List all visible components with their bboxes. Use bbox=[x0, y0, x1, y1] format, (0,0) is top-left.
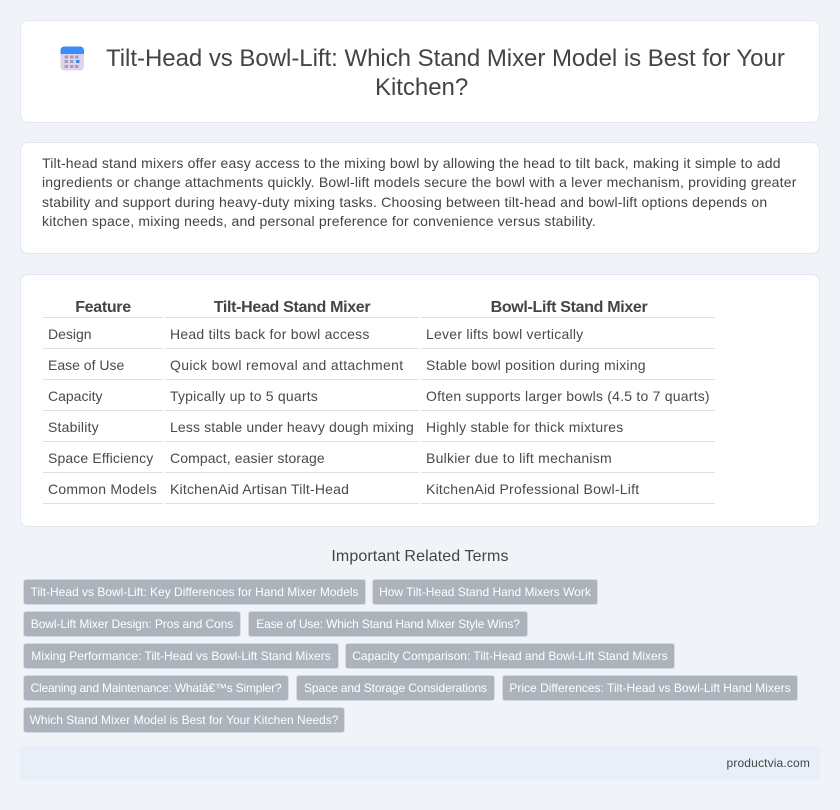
row: design bbox=[48, 326, 584, 342]
table header row: Bowl-Lift Stand Mixer bbox=[491, 299, 647, 316]
tag bbox=[23, 643, 339, 669]
table bbox=[43, 299, 715, 504]
tag: Mixing Performance: Tilt-Head vs Bowl-Lift Stand Mixers bbox=[31, 649, 331, 663]
title: Kitchen? bbox=[375, 74, 468, 101]
text block: introduction: ingredients or change attachments quickly. Bowl-lift models secure the bowl with a lever mechanism, providing greater bbox=[42, 174, 797, 190]
tag: Price Differences: Tilt-Head vs Bowl-Lift Hand Mixers bbox=[509, 681, 791, 695]
title: Tilt-Head vs Bowl-Lift: Which Stand Mixer Model is Best for Your bbox=[106, 45, 785, 72]
tag: Space and Storage Considerations bbox=[304, 681, 487, 695]
row: space efficiency bbox=[48, 450, 612, 466]
footer bbox=[20, 746, 820, 780]
row: ease of use: Ease of Use bbox=[48, 357, 124, 373]
tag bbox=[296, 675, 495, 701]
row: design: Lever lifts bowl vertically bbox=[426, 326, 583, 342]
panel: header bbox=[20, 20, 820, 123]
row: common models: KitchenAid Artisan Tilt-Head bbox=[170, 481, 349, 497]
panel: introduction bbox=[20, 142, 820, 254]
row: common models bbox=[48, 481, 640, 497]
row: capacity: Typically up to 5 quarts bbox=[170, 388, 318, 404]
row: ease of use bbox=[48, 357, 646, 373]
footer source text: productvia.com bbox=[727, 756, 810, 770]
tag bbox=[248, 611, 528, 637]
tag: Bowl-Lift Mixer Design: Pros and Cons bbox=[31, 617, 233, 631]
row: stability: Less stable under heavy dough mixing bbox=[170, 419, 414, 435]
tag: Cleaning and Maintenance: Whatâ€™s Simpler? bbox=[31, 681, 281, 695]
tag: Ease of Use: Which Stand Hand Mixer Style Wins? bbox=[256, 617, 520, 631]
text block: introduction: kitchen space, mixing needs, and personal preference for convenience versus stability. bbox=[42, 213, 596, 229]
tag: Capacity Comparison: Tilt-Head and Bowl-Lift Stand Mixers bbox=[352, 649, 668, 663]
text block: introduction bbox=[42, 155, 797, 229]
row: stability bbox=[48, 419, 624, 435]
panel: comparison table bbox=[20, 274, 820, 527]
tag bbox=[23, 579, 366, 605]
tag: How Tilt-Head Stand Hand Mixers Work bbox=[379, 585, 591, 599]
row: common models: Common Models bbox=[48, 481, 157, 497]
row: capacity bbox=[48, 388, 710, 404]
row: common models: KitchenAid Professional Bowl-Lift bbox=[426, 481, 639, 497]
icon: calendar bbox=[60, 46, 84, 70]
row: stability: Stability bbox=[48, 419, 99, 435]
row: space efficiency: Space Efficiency bbox=[48, 450, 153, 466]
table header row: Feature bbox=[75, 299, 131, 316]
tag bbox=[23, 611, 241, 637]
table header row bbox=[75, 299, 648, 316]
row: capacity: Capacity bbox=[48, 388, 102, 404]
tag: Which Stand Mixer Model is Best for Your Kitchen Needs? bbox=[30, 713, 338, 727]
table header row: Tilt-Head Stand Mixer bbox=[214, 299, 370, 316]
row: space efficiency: Bulkier due to lift mechanism bbox=[426, 450, 612, 466]
tag bbox=[23, 675, 289, 701]
text block: introduction: Tilt-head stand mixers offer easy access to the mixing bowl by allowing the head to tilt back, making it simple to add bbox=[42, 155, 781, 171]
tag bbox=[345, 643, 675, 669]
heading: important related terms: Important Related Terms bbox=[331, 548, 509, 565]
tag bbox=[23, 707, 345, 733]
tag bbox=[372, 579, 598, 605]
related term tags bbox=[23, 579, 798, 733]
row: design: Design bbox=[48, 326, 92, 342]
row: stability: Highly stable for thick mixtures bbox=[426, 419, 624, 435]
row: capacity: Often supports larger bowls (4.5 to 7 quarts) bbox=[426, 388, 710, 404]
row: ease of use: Stable bowl position during mixing bbox=[426, 357, 646, 373]
title bbox=[106, 45, 785, 101]
tag bbox=[502, 675, 798, 701]
row: space efficiency: Compact, easier storage bbox=[170, 450, 325, 466]
row: design: Head tilts back for bowl access bbox=[170, 326, 370, 342]
tag: Tilt-Head vs Bowl-Lift: Key Differences for Hand Mixer Models bbox=[30, 585, 359, 599]
text block: introduction: stability and support during heavy-duty mixing tasks. Choosing between tilt-head and bowl-lift options depends on bbox=[42, 194, 767, 210]
row: ease of use: Quick bowl removal and attachment bbox=[170, 357, 403, 373]
